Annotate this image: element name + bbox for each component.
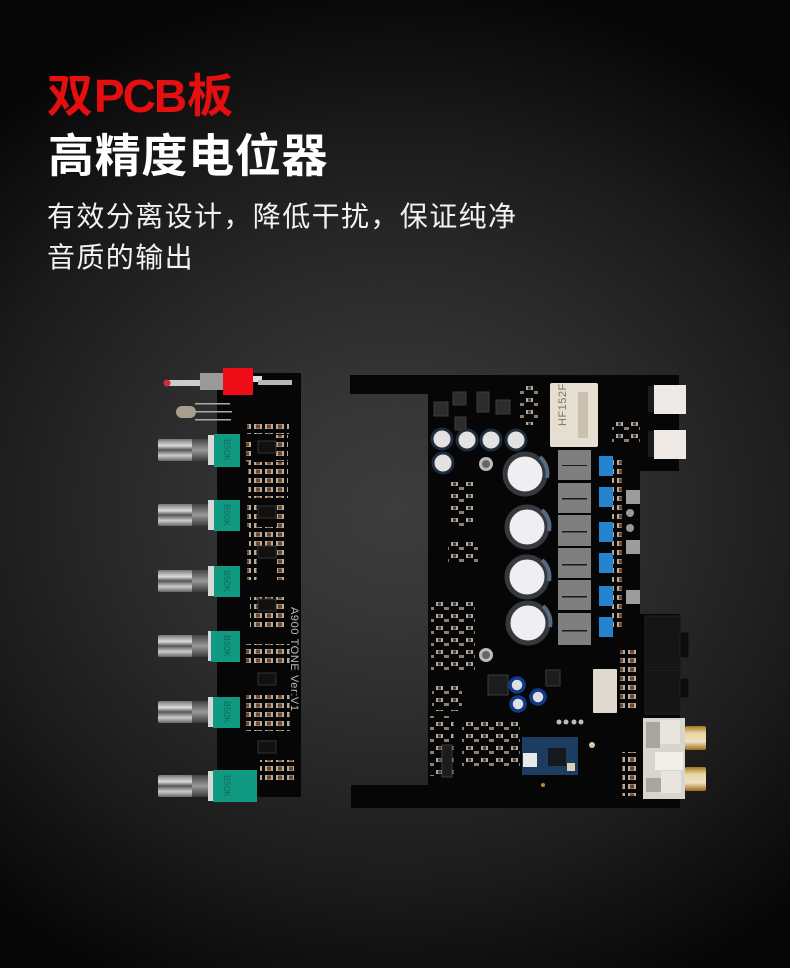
large capacitors (505, 454, 548, 643)
white connectors (648, 385, 686, 459)
potentiometers (158, 434, 257, 802)
potentiometers: B50K (222, 439, 232, 461)
text block: description: 音质的输出 (47, 242, 194, 273)
title: red heading: 双PCB板 (47, 70, 233, 122)
potentiometers: B50K (222, 570, 232, 592)
audio jacks (645, 616, 689, 714)
text block: description: 有效分离设计，降低干扰，保证纯净 (47, 201, 517, 232)
relay (550, 383, 598, 447)
right board body (350, 375, 680, 808)
relay: HF152F (557, 383, 569, 426)
right board: main PCB (350, 375, 706, 808)
board label: A900 TONE Ver:V1 (288, 607, 300, 712)
potentiometers: B50K (222, 701, 232, 723)
resistor clusters (430, 385, 640, 796)
toggle switch (164, 368, 292, 395)
gray film capacitors (558, 450, 591, 645)
left board: tone control PCB (158, 368, 301, 802)
gray mounting holes (480, 458, 492, 660)
side switches (626, 490, 640, 604)
chips (434, 392, 560, 777)
small electrolytic capacitors (432, 429, 526, 473)
potentiometers: B50K (222, 635, 232, 657)
blue capacitors (510, 678, 545, 711)
potentiometers: B50K (222, 775, 232, 797)
small relay (593, 669, 617, 713)
Bluetooth module (522, 737, 578, 775)
RCA connectors (643, 718, 706, 799)
LED (176, 403, 232, 420)
blue trimmer capacitors (599, 456, 613, 637)
title: white heading: 高精度电位器 (48, 130, 328, 182)
op-amp chips (258, 441, 276, 753)
resistor clusters (246, 420, 294, 780)
pin header pads (541, 720, 595, 787)
text block: description (47, 201, 517, 273)
left board body (217, 373, 301, 797)
potentiometers: B50K (222, 504, 232, 526)
capacitor polarity marks (540, 457, 550, 627)
